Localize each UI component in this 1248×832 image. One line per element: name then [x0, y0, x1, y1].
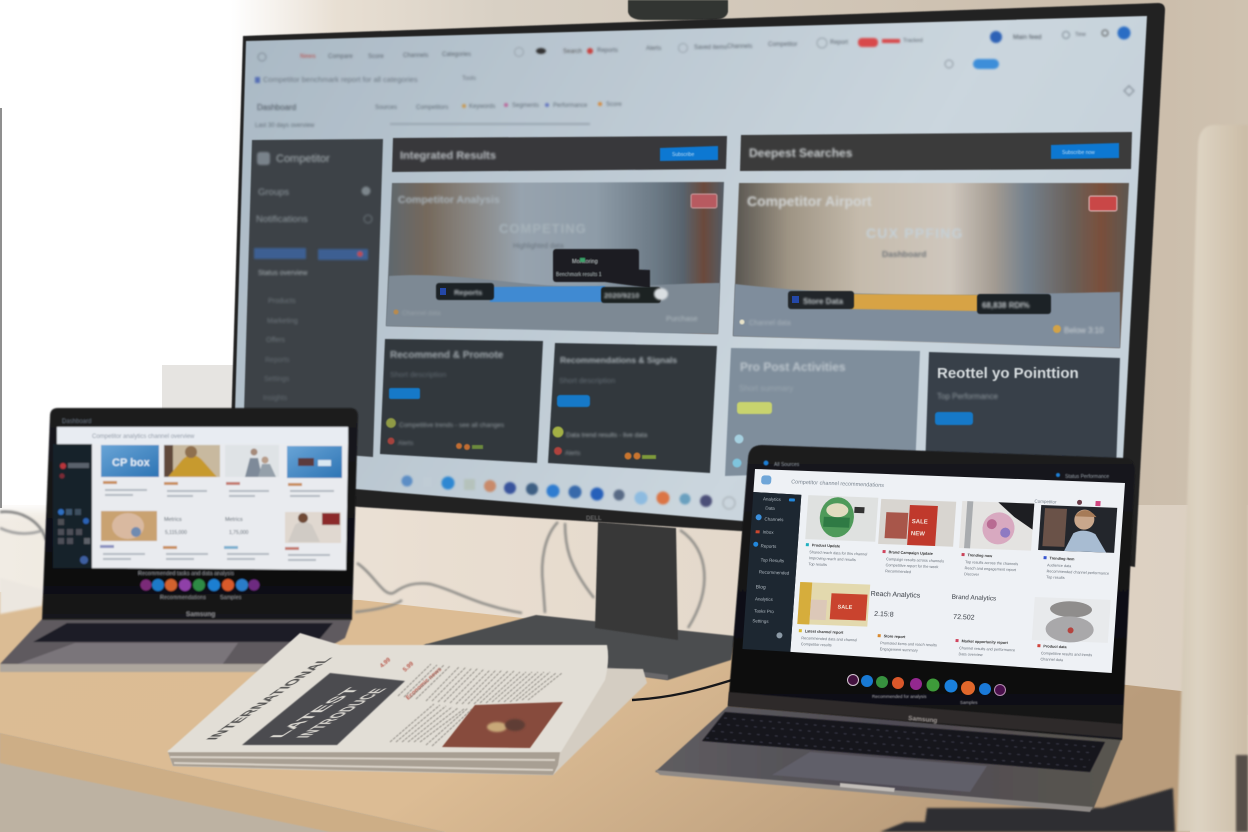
left laptop — [0, 408, 358, 672]
search row — [255, 59, 1134, 96]
laptop content area: Competitor analytics channel overview — [92, 434, 195, 440]
browser toolbar: Alerts — [646, 46, 661, 52]
filter row: Score — [606, 102, 622, 108]
stand neck — [595, 522, 678, 640]
caption blocks: Channel data — [1040, 657, 1064, 662]
caption blocks: Reach and engagement report — [964, 566, 1017, 572]
newspaper — [167, 633, 647, 775]
dark sidebar: Blog — [756, 584, 766, 591]
right label chip — [977, 294, 1051, 314]
thumbnail: colourful wall: SALE — [837, 605, 853, 611]
hero card right: Dashboard — [882, 249, 926, 259]
dark sidebar: Analytics — [755, 596, 774, 602]
filter row: Performance — [553, 103, 588, 109]
dark sidebar: Channels — [764, 517, 784, 522]
feature card two: Data trend results - live data — [566, 432, 648, 439]
feature card three: Short summary — [739, 384, 793, 393]
dock icons — [848, 674, 1006, 696]
red subheads: 4.99 — [379, 657, 393, 669]
search row: Tools — [462, 76, 476, 82]
dark sidebar: Analytics — [763, 496, 782, 502]
header row: Competitor channel recommendations — [791, 479, 884, 489]
sidebar panel — [243, 139, 383, 457]
left label chip: Store Data — [803, 297, 844, 306]
caption blocks: Channel results and performance — [959, 646, 1015, 652]
white content area — [742, 469, 1125, 673]
hero card left: Highlighted data — [513, 243, 564, 250]
thumbnail: green poster — [805, 495, 878, 542]
browser toolbar: Report — [830, 40, 848, 46]
top bar items: All Sources — [774, 462, 800, 468]
hinge band — [728, 692, 1122, 738]
stat labels: Metrics — [164, 517, 182, 523]
stat box one: 2.15:8 — [874, 611, 894, 619]
feature card three — [725, 348, 920, 476]
caption blocks: Trending now — [967, 553, 992, 558]
sidebar panel: Marketing — [267, 318, 298, 325]
thumbnail: pale people — [225, 445, 279, 477]
dark sidebar: Recommended — [759, 569, 790, 576]
caption blocks: Top results across the channels — [965, 560, 1018, 566]
caption blocks: Improving reach and results — [809, 556, 856, 562]
sidebar panel: Settings — [264, 376, 290, 383]
newspaper photo — [442, 702, 563, 748]
laptop lid — [728, 445, 1135, 740]
top bar items: Status Performance — [1065, 474, 1109, 480]
alert pill — [858, 38, 878, 47]
thumbnail: man presenter — [285, 512, 341, 543]
sidebar panel: Insights — [263, 395, 288, 402]
monitor screen — [233, 16, 1147, 552]
header banner right: Deepest Searches — [749, 146, 853, 160]
sidebar panel: Reports — [265, 357, 290, 364]
header banner right — [740, 132, 1132, 171]
thumbnail: yellow portrait — [164, 445, 220, 477]
trackpad — [772, 752, 987, 792]
hero card left: Purchase — [666, 314, 698, 323]
laptop base — [655, 706, 1122, 812]
stat labels — [164, 517, 249, 536]
laptop lid — [42, 408, 358, 620]
sidebar panel: Offers — [266, 337, 285, 344]
feature card one: Competitive trends - see all changes — [399, 422, 505, 429]
stat box two: 72.502 — [953, 614, 975, 622]
monitor brand: DELL — [586, 516, 602, 522]
browser toolbar: Main feed — [1013, 34, 1042, 41]
feature card two — [548, 343, 717, 473]
card caption lines — [100, 481, 334, 561]
left label chip — [788, 291, 854, 309]
filter row: Last 30 days overview — [255, 123, 315, 129]
filter row: Segments — [512, 103, 539, 109]
dark sidebar: Reports — [760, 543, 777, 549]
feature card one: Alerts — [398, 441, 413, 447]
laptop brand: Samsung — [186, 611, 215, 618]
monitor stand — [423, 522, 735, 680]
browser toolbar: Reports — [597, 48, 618, 54]
header banner left — [392, 136, 727, 172]
monitor bezel — [229, 3, 1165, 567]
hero card left — [386, 182, 724, 334]
feature card three: Pro Post Activities — [740, 360, 846, 374]
filter row: Dashboard — [257, 103, 296, 112]
monitor dock icons — [402, 476, 735, 509]
dark tooltip: Benchmark results 1 — [556, 272, 602, 278]
dark sidebar: Tasks Pro — [754, 608, 774, 614]
browser toolbar: Score — [368, 54, 384, 60]
dark tooltip: Monitoring — [572, 259, 598, 265]
dark sidebar: Data — [765, 506, 775, 511]
thumbnail: blue — [101, 445, 159, 477]
dark sidebar: Top Results — [760, 557, 785, 563]
laptop dock icons — [140, 579, 260, 591]
front page — [167, 633, 608, 752]
caption blocks — [797, 543, 1110, 664]
caption blocks: Recommended channel performance — [1046, 569, 1109, 576]
hero card left: Channel data — [402, 310, 441, 317]
feature card four: Reottel yo Pointtion — [937, 365, 1079, 382]
hero card left: Competitor Analysis — [398, 194, 500, 206]
feature card four: Top Performance — [937, 392, 998, 401]
dock labels — [872, 694, 978, 705]
right label chip: 2020/9210 — [604, 291, 639, 300]
hero card right: Competitor Airport — [747, 193, 872, 209]
caption blocks: Brand Campaign Update — [888, 550, 933, 556]
search row: Competitor benchmark report for all categories — [263, 75, 418, 84]
headline block: LATEST — [264, 687, 366, 738]
stat box one: Reach Analytics — [870, 591, 921, 600]
browser toolbar — [258, 26, 1130, 61]
caption blocks: Latest channel report — [805, 629, 844, 635]
caption blocks: Top results — [1046, 575, 1065, 580]
hero card right: CUX PPFING — [866, 225, 964, 241]
laptop base — [0, 618, 352, 672]
browser toolbar: News — [300, 54, 316, 60]
white notebook at left edge — [0, 578, 45, 614]
feature card one: Recommend & Promote — [390, 350, 504, 361]
stat labels: Metrics — [225, 517, 243, 523]
blue progress bar — [490, 286, 605, 302]
sidebar panel: Competitor — [276, 153, 330, 165]
sidebar panel: Notifications — [256, 214, 308, 225]
filter row: Sources — [375, 105, 397, 111]
hero card right: Below 3:10 — [1064, 326, 1104, 335]
sidebar panel: Team — [262, 415, 279, 422]
caption blocks: Product data — [1043, 644, 1068, 649]
browser toolbar: Competitor — [768, 42, 797, 48]
filter row: Keywords — [469, 104, 495, 110]
masthead: INTERNATIONAL — [204, 657, 337, 740]
laptop display — [742, 469, 1125, 673]
sidebar panel: Products — [268, 298, 296, 305]
stat labels: 5,115,000 — [165, 530, 187, 536]
thumbnail: woman portrait — [1038, 505, 1117, 553]
side object on right — [1177, 125, 1248, 832]
caption blocks: Engagement summary — [880, 647, 918, 653]
red subheads: 5.99 — [402, 661, 416, 673]
top bar items — [764, 460, 1109, 480]
caption blocks: Product Update — [812, 543, 840, 548]
caption blocks: Recommended data and channel — [801, 636, 857, 642]
dark sidebar: Settings — [752, 618, 770, 624]
laptop dock labels: Recommendations — [160, 595, 206, 601]
stat box one — [869, 591, 921, 620]
thumbnail: colourful wall — [797, 582, 870, 627]
caption blocks: Data overview — [958, 652, 983, 657]
caption blocks: Audience data — [1047, 563, 1072, 568]
header banner right: Subscribe now — [1062, 150, 1095, 156]
right laptop — [655, 445, 1135, 812]
front edge — [655, 770, 1093, 812]
stand base — [423, 615, 735, 680]
thumbnail: blue: CP box — [112, 457, 151, 469]
laptop top bar text: Dashboard — [62, 419, 91, 425]
webcam — [628, 0, 728, 20]
thumbnail: sprinkle ball — [959, 501, 1034, 551]
caption blocks: Competitive results and trends — [1041, 651, 1092, 657]
thumbnail: red box — [878, 499, 956, 547]
feature card two: Short description — [559, 376, 615, 385]
headline block — [242, 673, 405, 745]
stat labels: 1,75,000 — [229, 530, 249, 536]
left label chip — [436, 283, 494, 300]
browser toolbar: Channels — [727, 44, 752, 50]
dark sidebar: Inbox — [762, 529, 775, 535]
article columns — [390, 664, 562, 746]
laptop dock labels: Recommended tasks and data analysis — [138, 571, 234, 577]
browser toolbar: Channels — [403, 53, 428, 59]
thumbnail: red box: NEW — [911, 531, 925, 538]
red subheads: Economic news — [405, 666, 444, 701]
right label chip: 68,838 RDI% — [982, 301, 1030, 310]
header banner left: Subscribe — [672, 152, 694, 158]
caption blocks: Top results — [808, 562, 827, 567]
wooden desk — [0, 592, 1190, 832]
laptop dock labels: Samples — [220, 595, 242, 601]
caption blocks: Market opportunity report — [961, 639, 1009, 645]
stat box two — [950, 594, 997, 623]
background cables and desk clutter — [0, 512, 704, 628]
black cable — [632, 680, 732, 700]
dock labels: Samples — [960, 700, 978, 705]
hero card left: COMPETING — [499, 221, 587, 236]
laptop dock labels — [138, 571, 242, 601]
caption blocks: Store report — [884, 634, 906, 639]
caption blocks: Shared reach data for this channel — [809, 550, 868, 556]
left label chip: Reports — [454, 288, 482, 297]
browser toolbar: Saved items — [694, 45, 727, 51]
browser toolbar: Search — [563, 49, 582, 55]
feature card two: Alerts — [565, 451, 580, 457]
filter row — [255, 102, 622, 129]
browser toolbar: Tracked — [903, 38, 923, 44]
caption blocks: Discover — [964, 572, 980, 577]
header row: Competitor — [1034, 499, 1057, 505]
caption blocks: Trending item — [1049, 556, 1075, 561]
filter row: Competitors — [416, 105, 448, 111]
feature card two: Recommendations & Signals — [560, 355, 677, 365]
red subheads — [379, 657, 444, 701]
sidebar panel: Groups — [258, 187, 289, 198]
phone on desk — [880, 788, 1175, 832]
laptop sidebar — [53, 444, 92, 568]
dark sidebar — [742, 492, 801, 652]
thumbnail: stacked ceramics — [1032, 597, 1111, 644]
lower paper layers — [168, 668, 647, 775]
stat box two: Brand Analytics — [951, 594, 997, 603]
sidebar panel: Status overview — [258, 270, 308, 277]
thumbnail: blue product — [287, 446, 342, 478]
feature card one — [380, 339, 543, 463]
thumbnail: red box: SALE — [912, 519, 928, 526]
headline block: INTRODUCE — [291, 688, 391, 738]
browser toolbar: Time — [1075, 32, 1086, 38]
hinge brand: Samsung — [908, 715, 938, 725]
caption blocks: Recommended — [885, 569, 911, 574]
feature card one: Short description — [390, 370, 446, 379]
header row — [760, 475, 1102, 506]
dark tooltip — [553, 249, 650, 288]
feature card four — [925, 352, 1120, 470]
header banner left: Integrated Results — [400, 150, 496, 162]
caption blocks: Competitor results — [801, 642, 832, 647]
dock labels: Recommended for analysis — [872, 694, 927, 699]
laptop content area — [57, 427, 348, 570]
caption blocks: Campaign results across channels — [886, 557, 944, 563]
browser toolbar: Compare — [328, 54, 353, 60]
hero card right: Channel data — [749, 320, 791, 327]
hero card right — [733, 183, 1129, 348]
right label chip — [601, 287, 668, 303]
amber progress bar — [850, 294, 978, 311]
keyboard — [702, 712, 1105, 772]
monitor — [229, 0, 1165, 567]
thumbnail: warm group — [101, 511, 157, 541]
caption blocks: Competitive report for the week — [885, 563, 939, 569]
browser toolbar: Categories — [442, 52, 471, 58]
caption blocks: Promoted items and reach results — [880, 641, 937, 647]
